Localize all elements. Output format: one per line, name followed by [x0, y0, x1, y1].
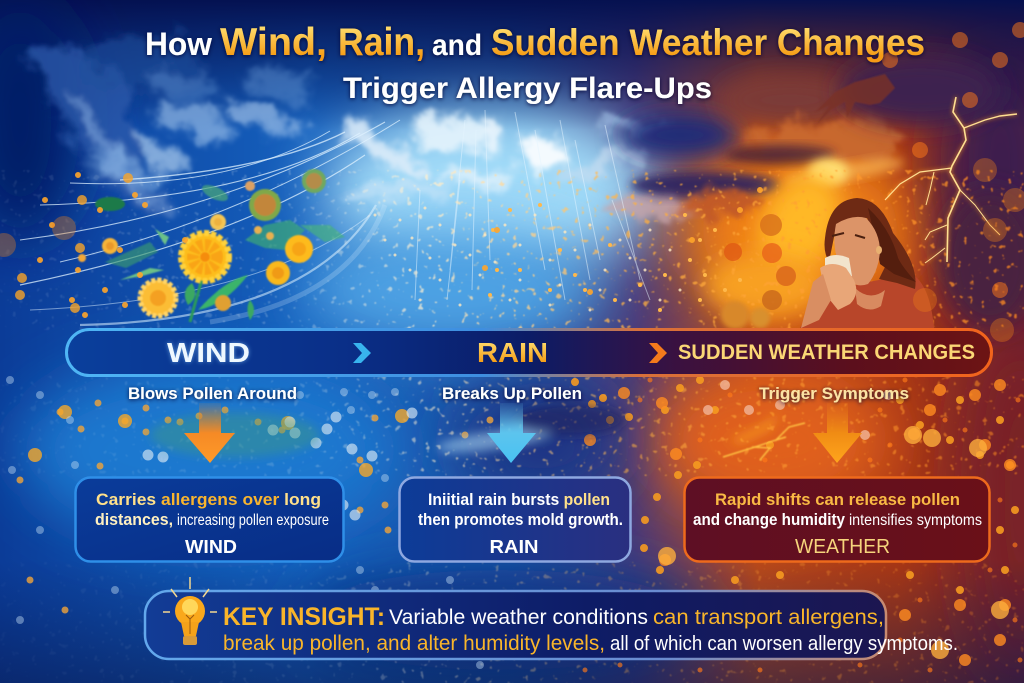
illustration: woman sneezing: [800, 198, 934, 328]
title: Wind,: [220, 21, 327, 64]
card: distances,: [95, 510, 173, 529]
label: sudden weather changes: SUDDEN WEATHER CHANGES: [678, 341, 975, 364]
insight text: KEY INSIGHT:: [223, 603, 385, 631]
arrow: [184, 403, 235, 463]
card: increasing pollen exposure: [177, 512, 329, 529]
label: wind: WIND: [167, 337, 250, 368]
insight text: all of which can worsen allergy symptoms.: [610, 633, 958, 655]
card: then promotes mold growth.: [418, 511, 623, 529]
card: [400, 478, 630, 562]
chevron: rain to weather: [649, 343, 667, 363]
illustration: pollen clumps: [721, 214, 796, 329]
subheading: Blows Pollen Around: [128, 385, 297, 403]
small flowers: [78, 169, 326, 311]
insight text: can transport allergens,: [653, 606, 884, 629]
card: WEATHER: [795, 536, 890, 558]
card: Iniitial rain bursts pollen: [428, 491, 610, 509]
header bar: [66, 330, 992, 376]
label: rain: RAIN: [477, 337, 548, 368]
clouds: storm side: [620, 55, 1024, 330]
column: weather: [684, 385, 990, 562]
lightning under bar: [723, 423, 805, 460]
small pale dust: [375, 208, 680, 310]
card: Rapid shifts can release pollen: [715, 490, 960, 509]
key insight panel: [145, 577, 958, 659]
flower lower left: [140, 280, 176, 316]
icon: light bulb: [163, 577, 217, 645]
illustration: wind-blown flowers: [78, 169, 345, 322]
chevron: wind to rain: [353, 343, 371, 363]
title: [145, 21, 925, 105]
clouds: rain side: [348, 110, 703, 216]
flower large: [181, 233, 229, 281]
title: Rain,: [338, 21, 425, 64]
insight text: break up pollen, and alter humidity levels,: [223, 632, 605, 655]
illustration: lightning: [885, 97, 1017, 263]
bar accent dashes: [106, 351, 330, 353]
title: Sudden Weather Changes: [491, 22, 925, 63]
column: wind: [76, 385, 344, 562]
arrow: [813, 403, 862, 463]
card: [76, 478, 344, 562]
title: How: [145, 26, 212, 62]
arrow: [487, 403, 536, 463]
lower left: [20, 403, 490, 610]
subheading: Breaks Up Pollen: [442, 385, 582, 403]
card: intensifies symptoms: [849, 512, 982, 529]
wind streaks: [20, 120, 400, 325]
dense pollen speckle texture: [0, 170, 1024, 683]
card: Carries allergens over long: [96, 490, 321, 509]
card: and change humidity: [693, 510, 845, 529]
card: [684, 478, 990, 562]
clouds: wind side: [30, 35, 434, 215]
leaves and stems: [95, 182, 345, 322]
rain streaks: [415, 110, 650, 300]
title: and: [432, 29, 482, 62]
insight text: [223, 603, 958, 655]
center and right lower: [575, 380, 1015, 590]
column: rain: [400, 385, 630, 562]
title: Trigger Allergy Flare-Ups: [343, 72, 712, 105]
card: RAIN: [490, 537, 538, 557]
card: WIND: [185, 537, 237, 557]
subheading: Trigger Symptoms: [759, 385, 909, 403]
insight text: Variable weather conditions: [389, 606, 648, 629]
lower clouds and streak texture: [150, 404, 780, 457]
